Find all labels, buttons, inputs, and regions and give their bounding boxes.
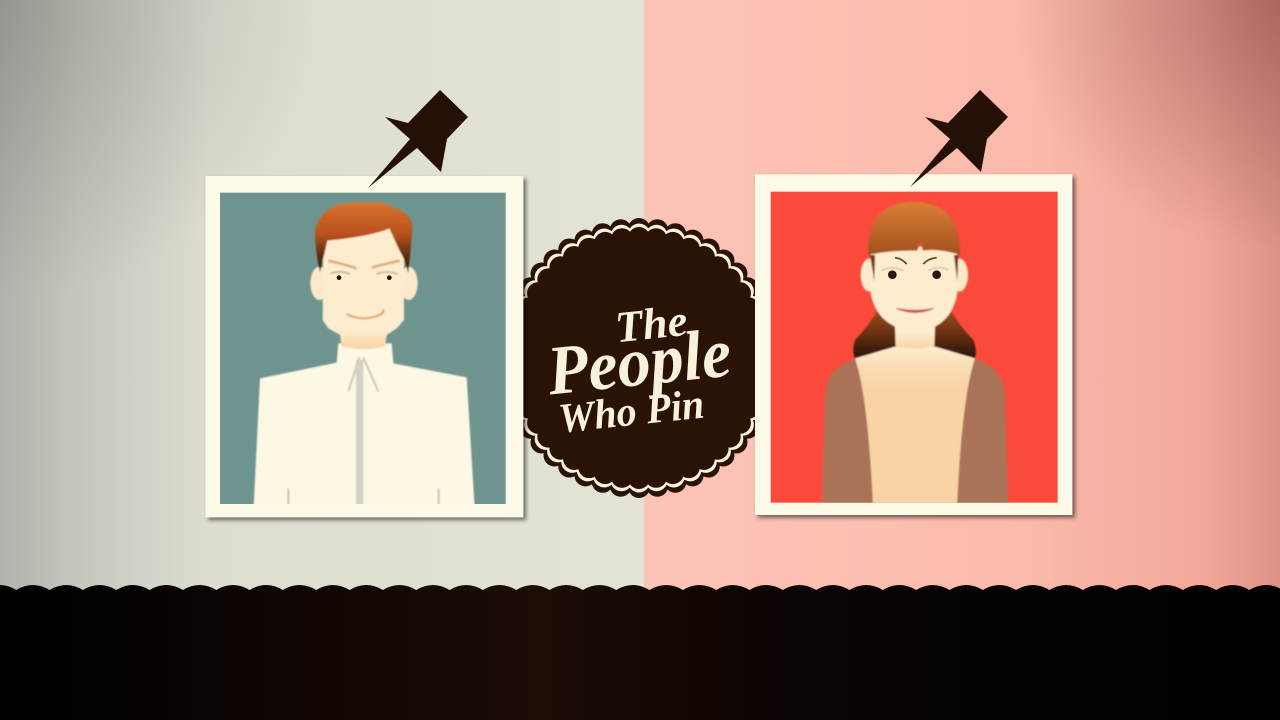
side strands [870, 255, 958, 282]
eye lids [882, 268, 948, 271]
top [855, 347, 975, 513]
woman figure [822, 202, 1008, 513]
icon: push pin left [368, 90, 468, 188]
hair [315, 202, 412, 273]
face and neck [323, 220, 404, 349]
shirt [253, 343, 475, 513]
background: pink right panel [644, 0, 1280, 600]
ears [310, 267, 328, 300]
face and neck [871, 247, 957, 348]
cardigan [822, 359, 1008, 513]
brows [328, 261, 400, 268]
ears [861, 258, 878, 292]
badge title text: Who Pin [556, 382, 706, 443]
photo frame [206, 176, 523, 517]
photo frame [755, 174, 1072, 515]
placket [356, 360, 363, 513]
panel: man portrait card [206, 176, 523, 517]
mouth [347, 309, 383, 318]
lower hair [853, 307, 897, 358]
badge title text: People [543, 315, 735, 410]
eye lids [331, 272, 397, 274]
badge: The People Who Pin [510, 229, 768, 487]
badge title text [540, 292, 738, 443]
badge title text: The [613, 296, 690, 352]
brows [895, 258, 937, 264]
icon: push pin right [910, 90, 1008, 187]
photo background [220, 193, 506, 504]
eyes [888, 270, 941, 279]
photo background [771, 192, 1058, 503]
scalloped dark ground band [0, 585, 1280, 720]
hair [868, 202, 960, 255]
mouth [897, 309, 933, 312]
man figure [253, 202, 475, 513]
panel: woman portrait card [755, 174, 1072, 515]
background: grey left panel [0, 0, 644, 600]
eyes [337, 275, 392, 280]
